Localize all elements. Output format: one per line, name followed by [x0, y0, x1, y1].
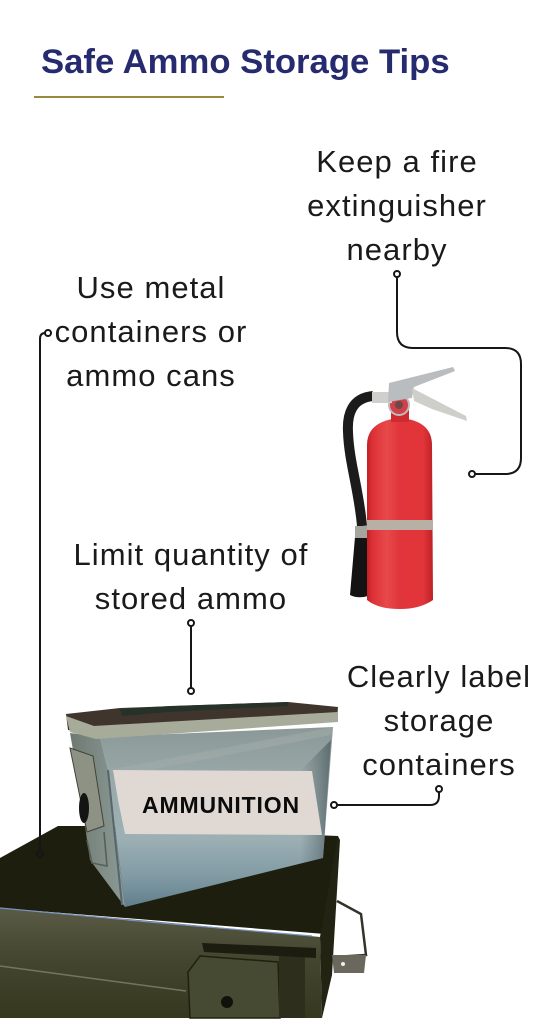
tip text: metal containers: containers or: [55, 314, 247, 349]
small can side with latch: [70, 733, 125, 907]
extinguisher body: [367, 419, 433, 609]
tip text: limit quantity: stored ammo: [95, 581, 287, 616]
tape label: [113, 770, 322, 835]
title underline: [34, 96, 224, 98]
large can lid: [0, 826, 338, 934]
small can body: [100, 727, 333, 907]
illustration: small steel ammo can: [66, 702, 338, 907]
large can side: [320, 836, 340, 1018]
large can latch: [188, 956, 280, 1018]
extinguisher hose: [348, 396, 373, 526]
tip text: limit quantity: Limit quantity of: [74, 537, 308, 572]
illustration: large dark ammo can: [0, 826, 366, 1018]
connector: limit quantity tip: [188, 620, 194, 694]
tip text: label containers: Clearly label: [347, 659, 531, 694]
tip text: fire extinguisher: Keep a fire: [316, 144, 478, 179]
tip text: label containers: containers: [362, 747, 516, 782]
tip text: metal containers: ammo cans: [66, 358, 236, 393]
connector: metal containers tip: [37, 330, 51, 857]
connector: label tip: [331, 786, 442, 808]
small can lid: [66, 702, 338, 733]
tip text: fire extinguisher: nearby: [346, 232, 448, 267]
illustration: fire extinguisher: [348, 367, 467, 609]
tip text: metal containers: Use metal: [76, 270, 226, 305]
extinguisher nozzle: [350, 537, 368, 597]
extinguisher neck and gauge: [391, 408, 409, 422]
title: Safe Ammo Storage Tips: [41, 43, 450, 81]
tip text: label containers: storage: [384, 703, 494, 738]
label text: AMMUNITION: [142, 792, 300, 818]
large can handle: [334, 901, 366, 957]
tip text: fire extinguisher: extinguisher: [307, 188, 487, 223]
extinguisher handle: [388, 367, 455, 402]
large can front: [0, 908, 322, 1018]
connector: fire extinguisher tip: [394, 271, 521, 477]
